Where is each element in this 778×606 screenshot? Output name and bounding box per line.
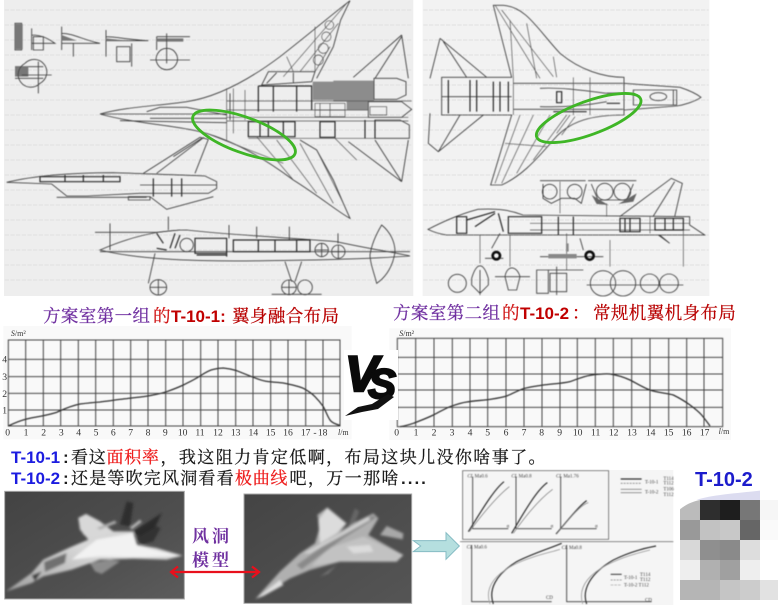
panel: T-10-2 blueprint (423, 0, 709, 296)
axis labels: T-10-1 chart: S/m² (11, 329, 26, 338)
legend: drag polar curves: T-10-2 T112 (624, 584, 649, 589)
legend: lift curves: T-10-1 (645, 480, 659, 485)
axis labels: T-10-1 chart: 16 (283, 428, 293, 439)
photo: T-10-2 wind tunnel model (244, 494, 412, 603)
drawing: T-10-2 side view (428, 178, 705, 270)
axis labels: T-10-1 chart: 2 (41, 428, 46, 439)
axis labels: T-10-1 chart: 2 (2, 389, 7, 400)
sub-charts: lift curves: α (507, 524, 510, 529)
sub-charts: drag polar curves (467, 543, 656, 604)
axis labels: T-10-1 chart: 3 (59, 428, 64, 439)
axis labels: T-10-1 chart: 4 (2, 355, 7, 366)
axis labels: T-10-1 chart: 13 (231, 428, 241, 439)
icon: VS brush mark: V (345, 346, 382, 402)
icon: VS brush mark: S (368, 360, 396, 407)
axis labels: T-10-2 chart: 16 (682, 428, 692, 439)
axis labels: T-10-2 chart: 14 (646, 428, 656, 439)
legend: lift curves: T106 (663, 488, 674, 493)
heading: T-10-2 group title: 的 (502, 303, 520, 323)
text: T-10-1 dialogue: T-10-1 (11, 448, 60, 467)
axis labels: T-10-1 chart: 8 (146, 428, 151, 439)
axis labels: T-10-2 chart: 0 (394, 428, 399, 439)
chart: polar curves panel (460, 470, 674, 605)
axis labels: T-10-1 chart: 15 (266, 428, 276, 439)
legend: lift curves: T112 (663, 493, 674, 498)
legend: lift curves (621, 477, 674, 498)
text: T-10-1 dialogue: 面积率 (106, 448, 160, 467)
heading: T-10-1 group title: 翼身融合布局 (232, 306, 339, 326)
axis labels: T-10-1 chart: 7 (128, 428, 133, 439)
sub-charts: lift curves: CL Ma1.76 (556, 474, 579, 479)
axis labels: T-10-1 chart: 9 (163, 428, 168, 439)
drawing: T-10-2 section views (448, 266, 683, 296)
text: T-10-2 dialogue: 吧，万一那啥 (290, 469, 400, 488)
text: T-10-2 dialogue: : (63, 469, 69, 488)
axis labels: T-10-2 chart (394, 329, 730, 439)
axis labels: T-10-1 chart: 6 (111, 428, 116, 439)
drawing: T-10-1 section views (15, 23, 190, 93)
legend: drag polar curves: T-10-1 (624, 576, 638, 581)
axis labels: T-10-1 chart: - (313, 428, 317, 439)
axis labels: T-10-1 chart: 18 (318, 428, 328, 439)
heading: T-10-1 group title (43, 306, 339, 326)
axis labels: T-10-2 chart: 17 (700, 428, 710, 439)
heading: T-10-2 group title: 方案室第二组 (393, 303, 500, 323)
arrow: red double-headed (171, 566, 259, 578)
heading: T-10-2 group title (393, 303, 736, 323)
legend: lift curves: T114 (663, 477, 674, 482)
text: T-10-2 dialogue: 极曲线 (235, 469, 288, 488)
axis labels: T-10-1 chart: 1 (24, 428, 29, 439)
label: wind tunnel model (192, 527, 232, 570)
sub-charts: drag polar curves: CL Ma0.8 (562, 546, 582, 551)
sub-charts: drag polar curves: CD (645, 599, 652, 604)
axis labels: T-10-2 chart: 8 (539, 428, 544, 439)
label: wind tunnel model: 风洞 (192, 527, 232, 546)
label: wind tunnel model: 模型 (192, 551, 232, 570)
axis labels: T-10-2 chart: 4 (468, 428, 473, 439)
axis labels: T-10-1 chart: 5 (94, 428, 99, 439)
legend: drag polar curves (611, 573, 651, 589)
axis labels: T-10-2 chart: S/m² (399, 329, 415, 338)
photo: T-10-1 wind tunnel model (5, 491, 184, 599)
text: T-10-1 dialogue: 看这 (71, 448, 106, 467)
axis labels: T-10-2 chart: 6 (504, 428, 509, 439)
heading: T-10-2 group title: T-10-2 (520, 304, 569, 323)
image: pixelated portrait (680, 491, 778, 600)
curve: T-10-1 cross-section area (8, 368, 340, 426)
axis labels: T-10-1 chart: 14 (249, 428, 258, 439)
axis labels: T-10-2 chart: 13 (627, 428, 637, 439)
legend: lift curves: T-10-2 (645, 490, 659, 495)
curve: T-10-2 cross-section area (400, 374, 710, 427)
text: T-10-1 dialogue: : (63, 448, 69, 467)
panel: T-10-1 blueprint (4, 0, 413, 296)
legend: drag polar curves: T112 (640, 578, 651, 583)
sub-charts: lift curves: α (595, 524, 598, 529)
axis labels: T-10-1 chart: 0 (5, 428, 10, 439)
arrow: teal to polar curves (413, 533, 459, 559)
axis labels: T-10-2 chart: 2 (432, 428, 437, 439)
axis labels: T-10-1 chart: 3 (2, 372, 7, 383)
icon: VS brush mark (344, 346, 398, 420)
axis labels: T-10-1 chart: 12 (213, 428, 223, 439)
sub-charts: lift curves: α (551, 524, 554, 529)
heading: T-10-2 group title: 常规机翼机身布局 (593, 303, 736, 323)
label: T-10-2: T-10-2 (695, 469, 753, 491)
chart: T-10-2 area distribution (389, 328, 731, 440)
heading: T-10-2 group title: ： (572, 303, 590, 323)
text: T-10-2 dialogue: T-10-2 (11, 469, 60, 488)
axis labels: T-10-2 chart: 12 (609, 428, 619, 439)
axis labels: T-10-2 chart: 9 (557, 428, 562, 439)
axis labels: T-10-1 chart: 10 (178, 428, 188, 439)
axis labels: T-10-1 chart: l/m (338, 428, 349, 437)
axis labels: T-10-1 chart: 1 (2, 406, 7, 417)
axis labels: T-10-1 chart (2, 329, 349, 439)
axis labels: T-10-2 chart: 1 (414, 428, 419, 439)
sub-charts: lift curves (460, 471, 673, 542)
axis labels: T-10-2 chart: 10 (573, 428, 583, 439)
axis labels: T-10-2 chart: l/m (719, 427, 730, 436)
sub-charts: lift curves: CL Ma0.8 (511, 474, 532, 479)
legend: drag polar curves: T114 (640, 573, 651, 578)
legend: lift curves: T112 (663, 482, 674, 487)
callout: green ellipse on T-10-2 (531, 83, 646, 153)
text: T-10-2 dialogue: .... (401, 469, 428, 488)
text: T-10-2 dialogue: 还是等吹完风洞看看 (71, 469, 235, 488)
axis labels: T-10-2 chart: 5 (485, 428, 490, 439)
axis labels: T-10-1 chart: 11 (195, 428, 205, 439)
drawing: T-10-1 top view (100, 1, 412, 218)
heading: T-10-1 group title: T-10-1: (171, 307, 226, 326)
drawing: T-10-2 top view (428, 5, 701, 185)
chart: T-10-1 area distribution (2, 326, 352, 439)
sub-charts: lift curves: CL Ma0.6 (467, 474, 488, 479)
heading: T-10-1 group title: 的 (153, 306, 171, 326)
text: T-10-1 dialogue: ，我这阻力肯定低啊，布局这块儿没你啥事了。 (160, 448, 547, 467)
callout: green ellipse on T-10-1 (187, 100, 301, 170)
axis labels: T-10-1 chart: 17 (301, 428, 311, 439)
axis labels: T-10-2 chart: 7 (522, 428, 527, 439)
axis labels: T-10-2 chart: 15 (664, 428, 674, 439)
drawing: T-10-1 side view (7, 137, 217, 209)
text: T-10-2 dialogue (11, 469, 428, 488)
axis labels: T-10-2 chart: 11 (591, 428, 600, 439)
heading: T-10-1 group title: 方案室第一组 (43, 306, 150, 326)
axis labels: T-10-1 chart: 4 (76, 428, 81, 439)
sub-charts: drag polar curves: CD (546, 596, 553, 601)
sub-charts: drag polar curves: CL Ma0.6 (467, 545, 487, 550)
axis labels: T-10-2 chart: 3 (450, 428, 455, 439)
drawing: T-10-1 profile view (95, 217, 410, 295)
